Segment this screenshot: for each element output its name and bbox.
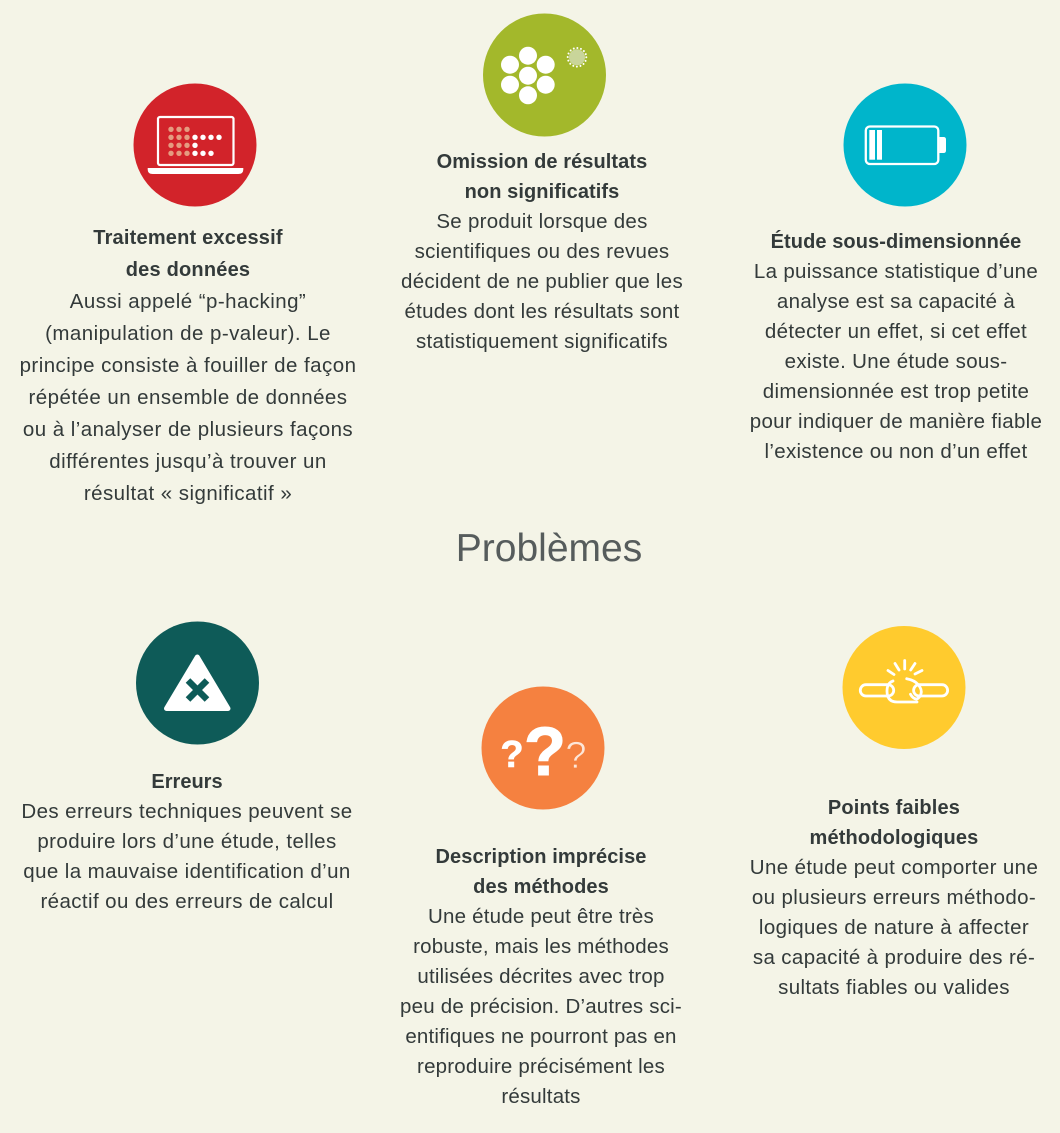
text block: Description imprécise: Une étude peut être très bbox=[428, 905, 654, 928]
text block: Traitement excessif bbox=[20, 227, 356, 505]
text block: Erreurs bbox=[21, 771, 353, 913]
text block: Omission de résultats bbox=[401, 151, 683, 353]
text block: Points faibles: sa capacité à produire des ré- bbox=[753, 946, 1035, 969]
text block: Description imprécise: utilisées décrites avec trop bbox=[417, 965, 665, 988]
text block: Description imprécise bbox=[400, 846, 682, 1108]
title: Problèmes bbox=[456, 527, 642, 570]
text block: Points faibles bbox=[750, 797, 1038, 999]
text block: Description imprécise: reproduire précisément les bbox=[417, 1055, 665, 1078]
text block: Description imprécise: Description imprécise bbox=[435, 846, 647, 868]
text block: Points faibles: Une étude peut comporter une bbox=[750, 856, 1038, 879]
text block: Traitement excessif: Aussi appelé “p-hacking” bbox=[70, 290, 306, 313]
text block: Étude sous-dimensionnée: Étude sous-dimensionnée bbox=[771, 231, 1021, 253]
text block: Étude sous-dimensionnée: dimensionnée est trop petite bbox=[763, 380, 1029, 403]
text block: Traitement excessif: (manipulation de p-valeur). Le bbox=[45, 322, 331, 345]
text block: Omission de résultats: décident de ne publier que les bbox=[401, 270, 683, 293]
text block: Traitement excessif: ou à l’analyser de plusieurs façons bbox=[23, 418, 353, 441]
text block: Traitement excessif: Traitement excessif bbox=[93, 227, 283, 249]
text block: Omission de résultats: scientifiques ou des revues bbox=[415, 240, 669, 263]
icon: question marks bbox=[482, 686, 604, 810]
text block: Erreurs: réactif ou des erreurs de calcul bbox=[40, 890, 334, 913]
text block: Étude sous-dimensionnée: l’existence ou non d’un effet bbox=[764, 440, 1028, 463]
icon: low battery bbox=[844, 84, 966, 206]
text block: Description imprécise: des méthodes bbox=[473, 876, 609, 898]
icon: question marks: ? bbox=[500, 734, 524, 776]
text block: Traitement excessif: principe consiste à fouiller de façon bbox=[20, 354, 356, 377]
icon: laptop with data dots bbox=[134, 84, 256, 206]
icon: broken chain link bbox=[842, 626, 966, 749]
text block: Points faibles: méthodologiques bbox=[810, 827, 978, 849]
text block: Points faibles: ou plusieurs erreurs méthodo- bbox=[752, 886, 1036, 909]
text block: Omission de résultats: études dont les résultats sont bbox=[404, 300, 680, 323]
text block: Traitement excessif: des données bbox=[126, 259, 250, 281]
text block: Description imprécise: peu de précision. D’autres sci- bbox=[400, 995, 682, 1018]
text block: Traitement excessif: répétée un ensemble de données bbox=[29, 386, 347, 409]
text block: Description imprécise: robuste, mais les méthodes bbox=[413, 935, 669, 958]
text block: Omission de résultats: Se produit lorsque des bbox=[436, 210, 648, 233]
text block: Description imprécise: résultats bbox=[501, 1085, 581, 1108]
text block: Omission de résultats: non significatifs bbox=[465, 181, 619, 203]
icon: circles cluster bbox=[483, 14, 606, 136]
text block: Étude sous-dimensionnée: existe. Une étude sous- bbox=[785, 350, 1007, 373]
text block: Étude sous-dimensionnée: La puissance statistique d’une bbox=[754, 260, 1038, 283]
text block: Omission de résultats: Omission de résultats bbox=[437, 151, 647, 173]
text block: Erreurs: produire lors d’une étude, telles bbox=[37, 830, 337, 853]
text block: Omission de résultats: statistiquement significatifs bbox=[416, 330, 668, 353]
text block: Points faibles: logiques de nature à affecter bbox=[759, 916, 1029, 939]
text block: Traitement excessif: résultat « significatif » bbox=[84, 482, 292, 505]
text block: Erreurs: Des erreurs techniques peuvent se bbox=[21, 800, 353, 823]
text block: Erreurs: Erreurs bbox=[151, 771, 223, 793]
icon: warning triangle with cross bbox=[136, 622, 259, 744]
text block: Points faibles: sultats fiables ou valides bbox=[778, 976, 1010, 999]
text block: Erreurs: que la mauvaise identification d’un bbox=[23, 860, 351, 883]
text block: Points faibles: Points faibles bbox=[828, 797, 960, 819]
text block: Étude sous-dimensionnée: analyse est sa capacité à bbox=[777, 290, 1015, 313]
text block: Étude sous-dimensionnée: détecter un effet, si cet effet bbox=[765, 320, 1027, 343]
text block: Étude sous-dimensionnée bbox=[750, 230, 1042, 463]
icon: question marks: ? bbox=[565, 735, 587, 777]
icon: question marks: ? bbox=[524, 713, 566, 790]
text block: Étude sous-dimensionnée: pour indiquer de manière fiable bbox=[750, 410, 1042, 433]
text block: Traitement excessif: différentes jusqu’à trouver un bbox=[49, 450, 327, 473]
text block: Description imprécise: entifiques ne pourront pas en bbox=[405, 1025, 677, 1048]
